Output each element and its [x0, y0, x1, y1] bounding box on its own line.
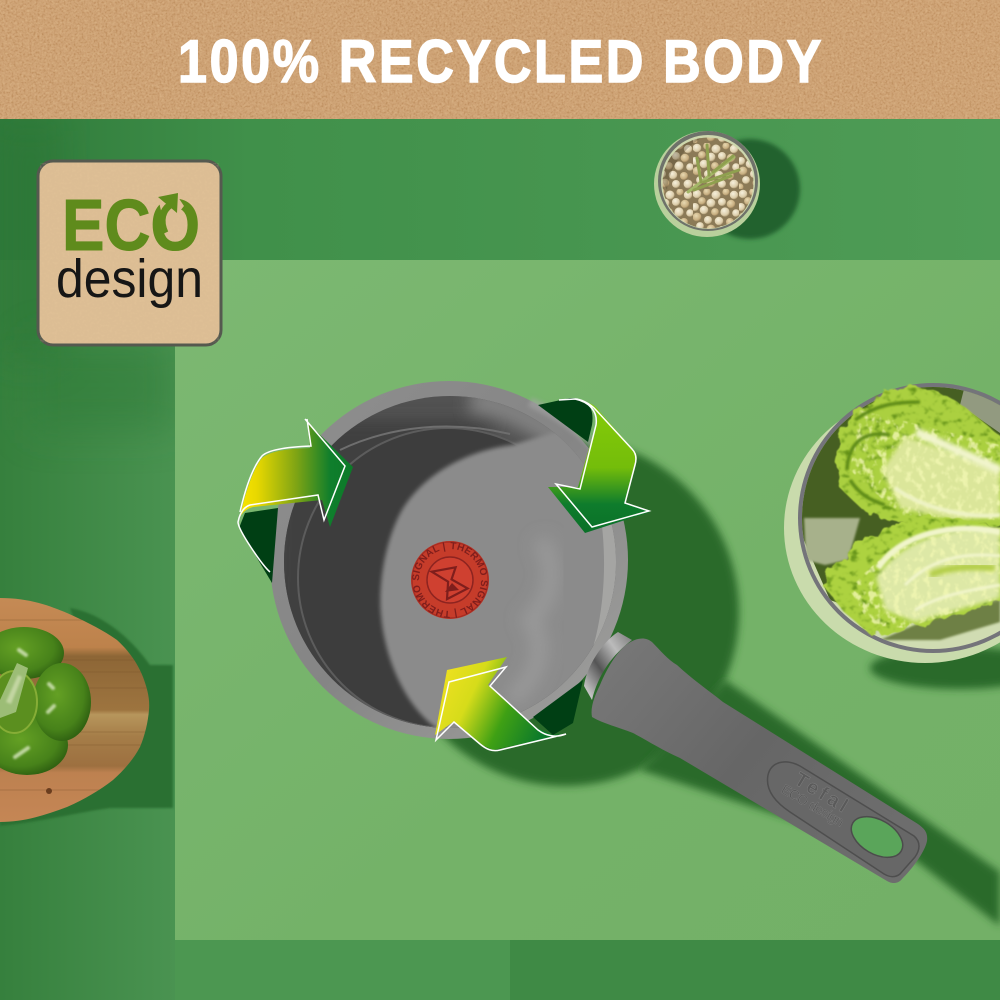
lettuce half: lower	[827, 518, 1000, 637]
lit top-right rim	[530, 402, 616, 480]
ECO wordmark: ECO	[62, 186, 200, 266]
title: 100% RECYCLED BODY	[178, 28, 824, 95]
pepper lobes	[0, 627, 64, 679]
lettuce bowl	[784, 380, 1000, 663]
metal ferrule	[584, 632, 632, 700]
bowl inner shadow	[802, 387, 1000, 602]
pan rim	[270, 381, 628, 739]
bowl gray rim	[798, 383, 1000, 653]
pepper stem cavity	[0, 671, 37, 733]
pan inner wall	[284, 396, 616, 728]
handle grip oval	[767, 762, 919, 877]
design wordmark: design	[56, 249, 203, 309]
header band: kraft paper	[0, 0, 1000, 119]
cutting board with shadow	[0, 598, 173, 826]
icon: rosemary sprig	[688, 145, 739, 192]
small bowl of peppercorns	[654, 131, 800, 239]
pan handle	[592, 638, 927, 883]
icon: hourglass	[432, 562, 469, 601]
thermo signal seal: THERMO SIGNAL | THERMO SIGNAL |	[412, 542, 488, 618]
lettuce half: upper	[837, 387, 1000, 526]
handle logo: ECO design: ECO design	[778, 781, 847, 830]
handle logo: Tefal: Tefal	[790, 768, 851, 817]
lit floor of pan	[378, 433, 616, 728]
saucepan	[237, 381, 928, 883]
panel: light green board	[175, 260, 1000, 940]
arrow: left recycling arrow	[238, 419, 353, 583]
green bell pepper	[0, 627, 91, 775]
badge: ECO design	[38, 161, 221, 345]
pepper highlights	[15, 650, 54, 757]
bowl outer wall	[784, 393, 1000, 663]
handle hanging hole	[844, 808, 910, 866]
arrow: upper-right recycling arrow	[538, 398, 650, 533]
icon: recycling arrow on the O	[158, 193, 184, 233]
cast shadows on the board	[391, 438, 1000, 926]
arrow: bottom recycling arrow	[435, 657, 583, 751]
